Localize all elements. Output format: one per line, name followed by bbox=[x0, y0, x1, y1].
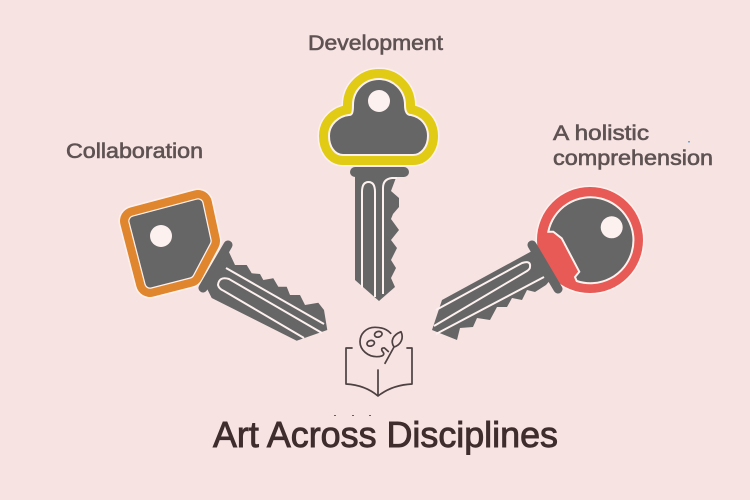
title: Art Across Disciplines bbox=[213, 414, 558, 455]
key collar and blade bbox=[203, 245, 327, 341]
cropped text remnants bbox=[334, 415, 371, 416]
key: red, right bbox=[432, 186, 644, 340]
label: Collaboration: Collaboration bbox=[66, 140, 203, 163]
label: A holistic comprehension: A holistic bbox=[553, 122, 649, 145]
key head: orange rounded pentagon bbox=[134, 204, 206, 283]
key collar and blade bbox=[350, 167, 409, 301]
palette wells bbox=[374, 331, 383, 338]
key: orange, left bbox=[134, 204, 327, 341]
key head: yellow cloud shape bbox=[329, 79, 428, 155]
key: yellow, centre bbox=[329, 79, 428, 301]
label: Development: Development bbox=[308, 32, 443, 55]
book bbox=[346, 348, 412, 396]
label: A holistic comprehension bbox=[553, 122, 713, 170]
key head: red circle bbox=[536, 186, 644, 294]
palette bbox=[360, 327, 391, 357]
stray blue speck bbox=[688, 141, 690, 142]
paintbrush bbox=[385, 332, 402, 363]
key collar and blade bbox=[432, 245, 558, 340]
icon: palette over open book bbox=[346, 327, 412, 396]
label: A holistic comprehension: comprehension bbox=[553, 147, 713, 170]
